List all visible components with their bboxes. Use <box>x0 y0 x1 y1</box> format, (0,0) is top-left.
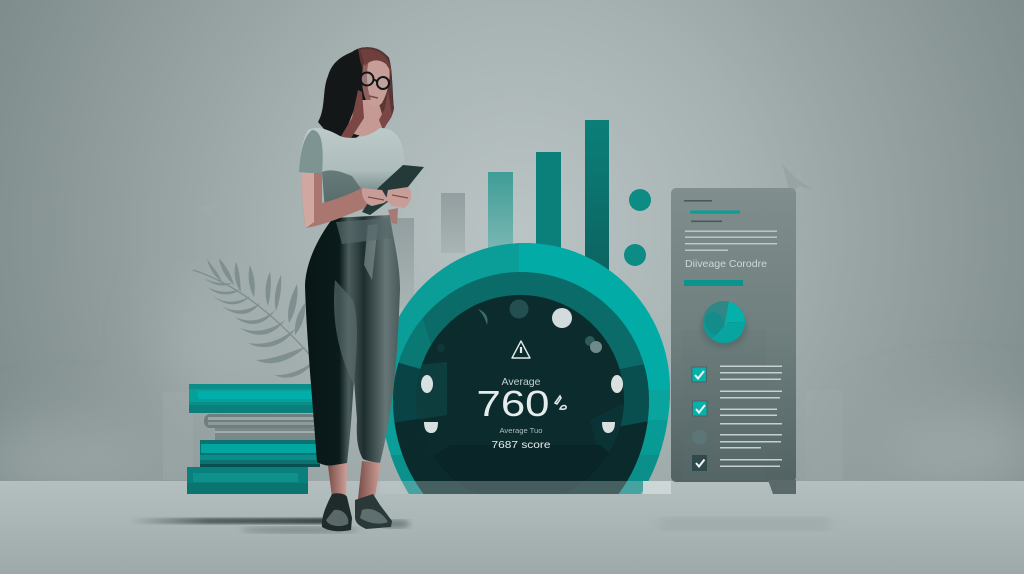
mouth <box>369 96 378 98</box>
book 2 <box>200 440 320 467</box>
right forearm <box>388 208 398 224</box>
floor <box>0 481 1024 574</box>
floor shadows <box>130 518 830 533</box>
plant leaf <box>193 258 316 378</box>
warning icon <box>512 341 530 358</box>
faint bird left <box>197 187 226 216</box>
fog clouds <box>0 280 1024 490</box>
faint buildings <box>163 390 843 480</box>
score text: 7687 score <box>492 439 551 451</box>
small glyph near score <box>555 396 566 409</box>
panel foot <box>768 480 796 494</box>
teal bar <box>684 280 743 286</box>
person <box>299 47 424 531</box>
inner dial <box>416 295 624 430</box>
tablet <box>362 165 424 215</box>
front hair strand <box>360 49 391 72</box>
checkbox 3 empty <box>692 430 707 444</box>
book 3 bottom <box>187 467 308 494</box>
grey book pages <box>204 414 317 440</box>
legs <box>328 463 347 497</box>
shirt <box>299 128 405 222</box>
stack of books <box>187 384 320 494</box>
gauge <box>386 243 670 494</box>
neck <box>346 100 386 136</box>
checklist lines <box>720 366 782 467</box>
glasses <box>360 72 389 89</box>
gauge markers <box>421 300 623 433</box>
pants <box>305 215 400 466</box>
score text: Average Tuo <box>500 426 542 435</box>
faint bird right <box>782 164 813 192</box>
face <box>362 58 390 107</box>
report panel <box>671 188 796 494</box>
header lines <box>684 200 777 251</box>
shoes <box>322 493 352 531</box>
checkbox 1 <box>692 367 706 382</box>
checkbox 2 <box>692 401 707 416</box>
panel title: Diiveage Corodre <box>685 258 767 270</box>
teal dot lower <box>624 244 646 266</box>
score text: 760 <box>476 383 550 424</box>
hands <box>362 188 388 206</box>
teal dot upper <box>629 189 651 211</box>
checkbox 4 dark <box>692 455 707 471</box>
score text: Average <box>502 376 541 388</box>
outer ring <box>386 243 670 494</box>
middle ring <box>385 270 655 500</box>
bar chart <box>390 120 609 308</box>
arm <box>302 173 372 228</box>
score text <box>478 378 550 448</box>
pie chart <box>701 301 747 348</box>
book 1 top <box>189 384 317 413</box>
translucent floor band <box>380 481 671 494</box>
back hair <box>318 47 394 148</box>
